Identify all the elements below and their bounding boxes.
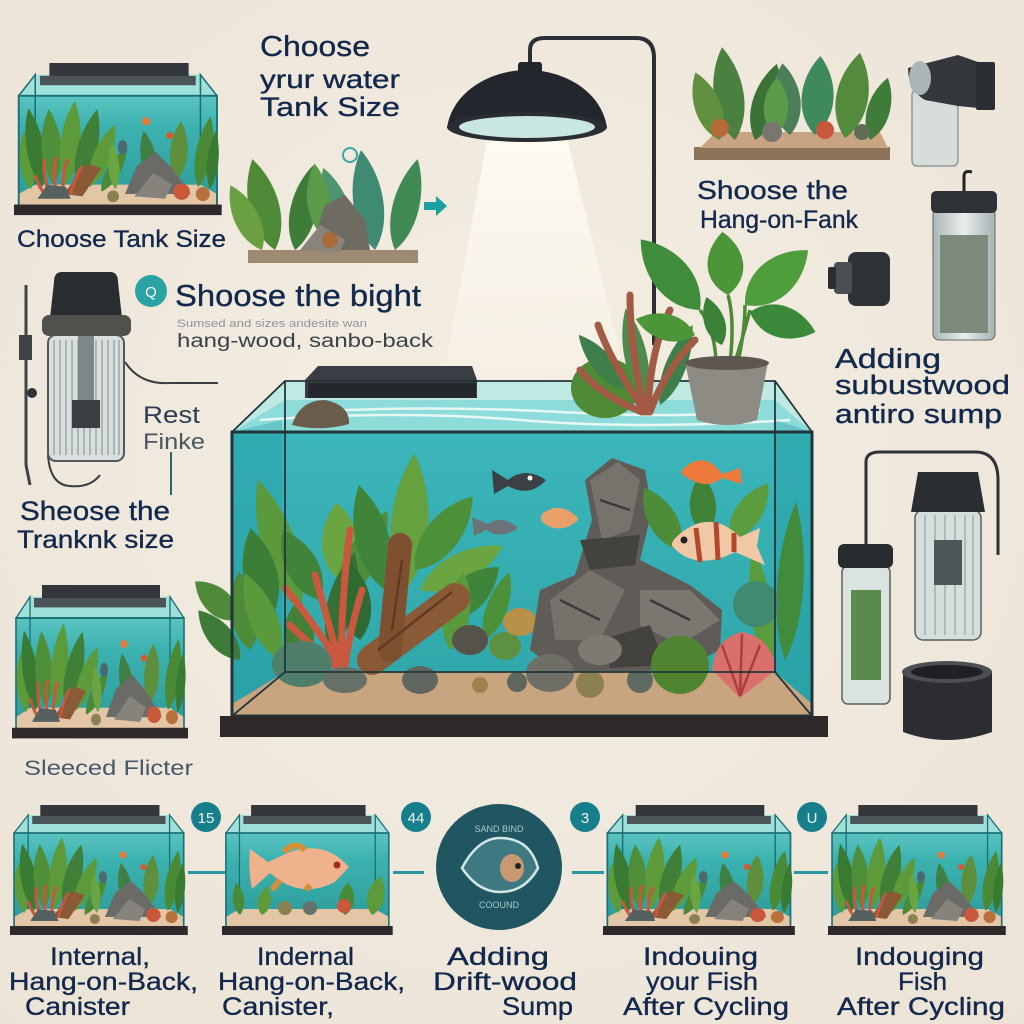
label: step 2: Indernal — [257, 943, 354, 971]
sub-caption: hang-wood, sanbo-back — [177, 331, 434, 352]
connector 3 — [572, 871, 604, 874]
icon: filter head — [828, 252, 890, 306]
label: step 2: Canister, — [222, 993, 334, 1021]
fish group — [472, 460, 765, 565]
badge 4: U — [807, 810, 817, 827]
circular fish badge: COOUND — [479, 900, 519, 910]
caption: choose tank size: Choose Tank Size — [17, 226, 226, 253]
small tank: choose tank size — [14, 63, 222, 215]
badge 2 — [401, 802, 431, 832]
heading: choose water tank size — [260, 31, 400, 122]
label: step 5: Fish — [898, 968, 947, 996]
badge 4 — [797, 802, 827, 832]
label: step 4 — [623, 943, 789, 1021]
hood light — [305, 366, 477, 398]
step tank 1 — [10, 805, 188, 935]
tank body — [232, 381, 812, 716]
label: step 3: Adding — [447, 943, 549, 971]
label: step 3 — [433, 943, 577, 1021]
label: step 4: your Fish — [646, 968, 758, 996]
caption: rest finke — [143, 402, 205, 454]
icon: small green media filter — [838, 544, 893, 704]
icon: media cartridge — [931, 172, 997, 340]
driftwood — [372, 545, 455, 660]
caption: sheose the tank size — [17, 496, 174, 554]
glass edges — [232, 381, 812, 716]
label: step 3: Sump — [502, 993, 573, 1021]
aquascape diorama — [219, 148, 430, 263]
badge 3: 3 — [581, 810, 589, 827]
icon: hanging lamp — [447, 38, 654, 345]
step badge — [135, 275, 167, 307]
label: step 3: Drift-wood — [433, 968, 577, 996]
tank stand — [220, 716, 828, 737]
caption: sheose the tank size: Sheose the — [20, 496, 170, 526]
step tank 5 — [828, 805, 1006, 935]
circular fish badge: SAND BIND — [474, 824, 524, 834]
label: step 5 — [837, 943, 1005, 1021]
moss rocks and pebbles — [272, 608, 653, 698]
connector line — [170, 452, 172, 495]
label: step 4: Indouing — [643, 943, 758, 971]
plant diorama, top right — [683, 45, 899, 160]
label: step 5: Indouging — [855, 943, 984, 971]
big fish — [249, 848, 349, 889]
badge 2: 44 — [408, 810, 424, 827]
light beam — [442, 135, 628, 385]
small tank: select filter — [12, 585, 188, 738]
sand bed — [232, 672, 812, 716]
caption: sleeced flicter: Sleeced Flicter — [24, 757, 193, 780]
caption: adding substrate: Adding — [835, 343, 941, 374]
icon: light head, top right — [908, 55, 995, 166]
connector 4 — [794, 871, 828, 874]
pipe between right filters — [866, 452, 998, 555]
label: step 2 — [218, 943, 405, 1021]
label: step 4: After Cycling — [623, 993, 789, 1021]
right plants — [632, 473, 809, 672]
potted plant — [626, 227, 820, 425]
step badge: Q — [145, 284, 157, 301]
heading: choose water tank size: Choose — [260, 31, 370, 63]
badge 1 — [191, 802, 221, 832]
caption: adding substrate — [835, 343, 1010, 429]
caption: hang-on tank: Shoose the — [697, 175, 848, 205]
label: step 5: After Cycling — [837, 993, 1005, 1021]
red coral — [285, 530, 362, 665]
left plants — [186, 452, 519, 668]
label: step 1: Hang-on-Back, — [9, 968, 198, 996]
caption: sheose the tank size: Tranknk size — [17, 526, 174, 554]
label: step 2: Hang-on-Back, — [218, 968, 405, 996]
step tank 2 with fish — [222, 805, 393, 935]
heading: choose water tank size: Tank Size — [260, 92, 400, 122]
connector 2 — [393, 871, 424, 874]
floating rock — [292, 400, 349, 428]
badge 3 — [570, 802, 600, 832]
rock tower — [526, 458, 722, 692]
label: step 1 — [9, 943, 198, 1021]
plants tank 2 — [231, 875, 388, 917]
icon: canister filter, left — [19, 272, 218, 486]
caption: rest finke: Finke — [143, 429, 205, 454]
moss ball, bush and shell — [651, 581, 779, 698]
badge 1: 15 — [198, 810, 214, 827]
icon: black filter cup — [902, 661, 992, 740]
connector 1 — [188, 871, 225, 874]
heading: choose water tank size: yrur water — [260, 64, 400, 94]
blurred sub-caption: Sumsed and sizes andesite wan — [177, 318, 367, 330]
label: step 1: Internal, — [50, 943, 150, 971]
caption: rest finke: Rest — [143, 402, 200, 429]
caption: hang-on tank — [697, 175, 858, 234]
icon: tall filter, right — [911, 472, 985, 640]
caption: adding substrate: subustwood — [835, 370, 1010, 400]
circular fish badge — [436, 804, 562, 930]
label: step 1: Canister — [25, 993, 130, 1021]
main aquarium — [186, 366, 828, 737]
arrow — [424, 196, 447, 216]
caption: adding substrate: antiro sump — [835, 399, 1002, 429]
step tank 4 — [603, 805, 795, 935]
plants above tank, left of pot — [571, 295, 702, 418]
caption: hang-on tank: Hang-on-Fank — [700, 206, 858, 234]
heading: shoose the bight: Shoose the bight — [175, 278, 421, 313]
